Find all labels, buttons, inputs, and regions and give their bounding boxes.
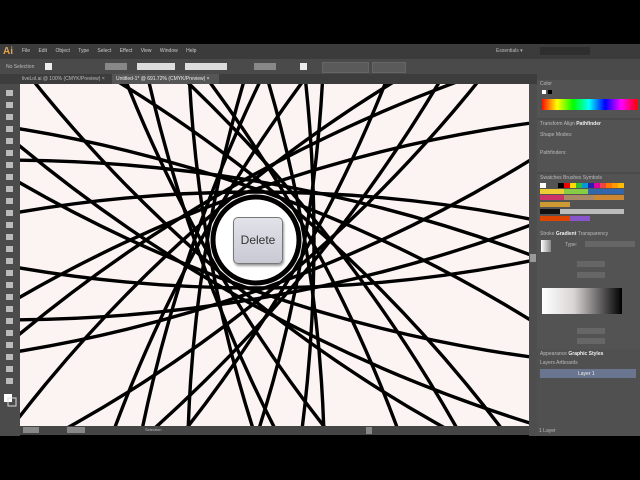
panel: layers: Layers Artboards <box>540 360 578 366</box>
panel: gradient: Type: <box>565 242 577 248</box>
panel: color <box>537 80 640 118</box>
panel: pathfinder: Pathfinders: <box>540 150 567 156</box>
status bar <box>20 426 529 435</box>
panel: swatches: Swatches Brushes Symbols <box>540 175 602 181</box>
vertical scrollbar <box>529 84 537 436</box>
document tabs <box>0 74 537 84</box>
control bar <box>0 59 640 74</box>
workspace label: Essentials ▾ <box>496 48 523 54</box>
panel: layers: Appearance Graphic Styles <box>540 351 603 357</box>
panel: gradient: Stroke Gradient Transparency <box>540 231 608 237</box>
canvas artwork <box>20 84 529 426</box>
panel: swatches <box>537 174 640 230</box>
panel: gradient <box>537 230 640 350</box>
panel: color: Color <box>540 81 552 87</box>
status bar: Selection <box>145 427 161 432</box>
icon: Ai logo: Ai <box>3 46 13 57</box>
panel: pathfinder <box>537 120 640 172</box>
layer row: Layer 1 <box>578 371 595 377</box>
document tabs: liveLol.ai @ 100% (CMYK/Preview) × <box>22 76 105 82</box>
panel: pathfinder: Shape Modes: <box>540 132 572 138</box>
search box <box>540 47 590 55</box>
control bar: No Selection <box>6 64 34 70</box>
right panels <box>537 59 640 436</box>
panel: pathfinder: Transform Align Pathfinder <box>540 121 601 127</box>
layer row <box>540 369 636 378</box>
left toolbar <box>0 84 20 436</box>
document tabs: Untitled-1* @ 691.72% (CMYK/Preview) × <box>116 76 210 82</box>
panel: layers <box>537 349 640 436</box>
delete key button: Delete <box>241 233 275 247</box>
menu bar <box>0 44 640 59</box>
menu items: File Edit Object Type Select Effect View Window Help <box>22 48 196 54</box>
delete key button <box>233 217 283 264</box>
panel: layers: 1 Layer <box>539 428 556 434</box>
